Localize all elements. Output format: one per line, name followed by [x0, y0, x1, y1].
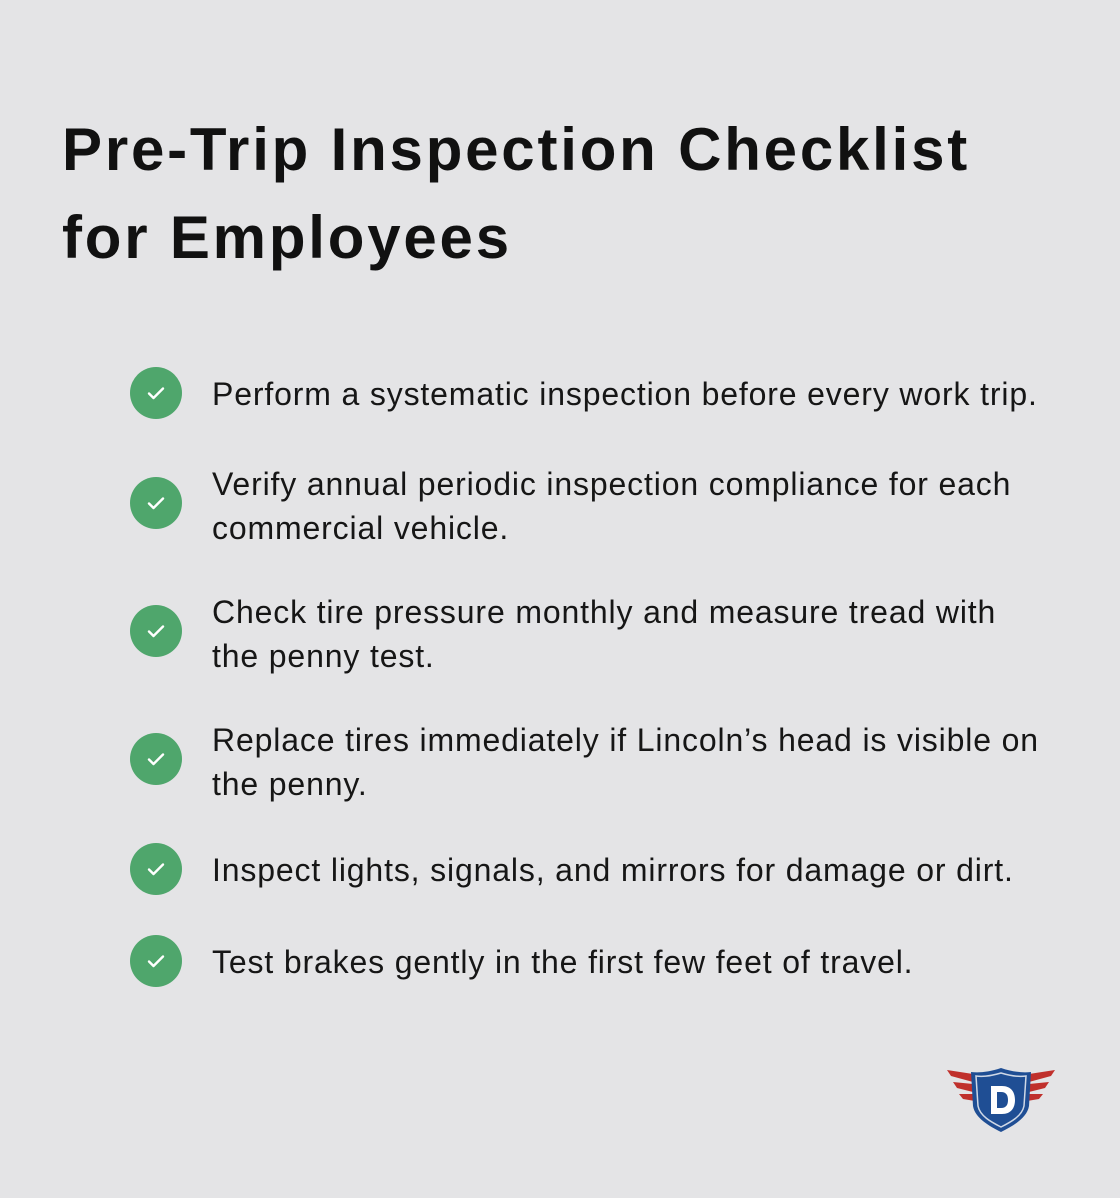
text: Check tire pressure monthly and measure tread with — [212, 594, 996, 630]
icon: check — [130, 605, 182, 657]
icon: check — [130, 935, 182, 987]
item 3 — [130, 594, 996, 674]
item 2 — [130, 466, 1011, 546]
text: Inspect lights, signals, and mirrors for damage or dirt. — [212, 852, 1014, 888]
text: the penny test. — [212, 638, 435, 674]
text: Test brakes gently in the first few feet of travel. — [212, 944, 913, 980]
text: Replace tires immediately if Lincoln’s head is visible on — [212, 722, 1039, 758]
icon: check — [130, 367, 182, 419]
text: Verify annual periodic inspection compliance for each — [212, 466, 1011, 502]
icon: check — [130, 843, 182, 895]
text — [212, 466, 1011, 546]
text — [212, 594, 996, 674]
text: Perform a systematic inspection before every work trip. — [212, 376, 1038, 412]
text: the penny. — [212, 766, 368, 802]
item 4 — [130, 722, 1039, 802]
title: for Employees — [62, 204, 512, 271]
title: Pre-Trip Inspection Checklist — [62, 116, 970, 183]
text: commercial vehicle. — [212, 510, 509, 546]
text — [212, 722, 1039, 802]
icon: check — [130, 733, 182, 785]
item 6 — [130, 935, 913, 987]
item 1 — [130, 367, 1038, 419]
title — [62, 116, 970, 271]
logo — [947, 1068, 1055, 1132]
icon: check — [130, 477, 182, 529]
item 5 — [130, 843, 1014, 895]
